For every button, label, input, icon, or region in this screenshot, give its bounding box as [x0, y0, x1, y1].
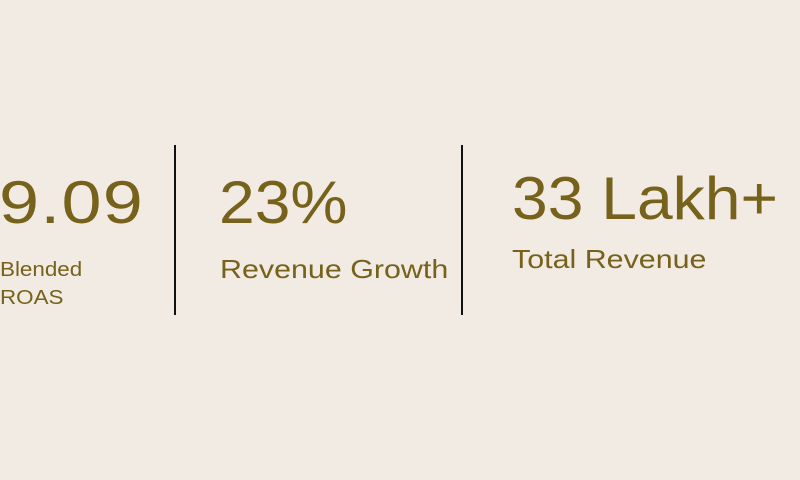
label: blended roas: Blended — [0, 259, 82, 281]
value: 23%: 23% — [219, 169, 348, 236]
label: blended roas — [0, 259, 82, 309]
label: blended roas: ROAS — [0, 287, 63, 309]
label: total revenue: Total Revenue — [512, 244, 706, 274]
stat: blended roas — [0, 169, 144, 309]
label: revenue growth: Revenue Growth — [220, 254, 448, 284]
value: 9.09: 9.09 — [0, 169, 144, 236]
divider 2 — [461, 145, 463, 315]
stat: total revenue — [512, 165, 778, 274]
stat: revenue growth — [219, 169, 448, 284]
value: 33 lakh+: 33 Lakh+ — [512, 165, 778, 232]
divider 1 — [174, 145, 176, 315]
